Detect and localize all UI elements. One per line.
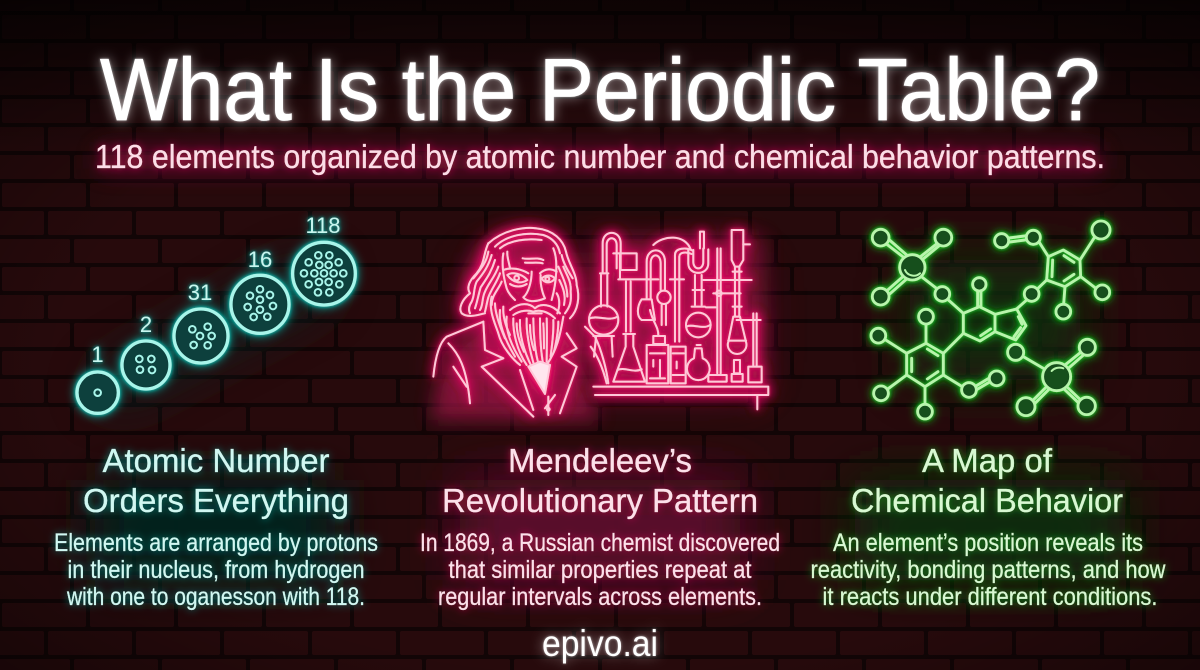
coloured wall halos [90, 150, 1125, 580]
heading: atomic number: Atomic Number [102, 443, 330, 480]
panel: atomic number [54, 213, 378, 611]
bonds [885, 236, 1096, 404]
body text: Mendeleev: In 1869, a Russian chemist discovered [420, 529, 780, 557]
heading: Mendeleev [442, 443, 758, 520]
panel: Mendeleev [420, 228, 780, 611]
body text: Mendeleev: that similar properties repeat at [448, 556, 752, 584]
heading: Mendeleev: Mendeleev’s [508, 443, 692, 480]
icon: molecule diagram [871, 221, 1110, 419]
icon: growing atoms diagram: 118 [305, 213, 341, 238]
subtitle: 118 elements organized by atomic number and chemical behavior patterns. [95, 138, 1105, 175]
tubes and bottles [638, 238, 693, 383]
illustration: Mendeleev portrait and lab apparatus [433, 228, 768, 417]
heading: chemical behavior [851, 443, 1123, 520]
U-tube and round flask [686, 232, 716, 380]
body text: chemical behavior: it reacts under different conditions. [822, 583, 1158, 611]
heading: atomic number: Orders Everything [83, 483, 349, 520]
portrait [433, 228, 608, 417]
stand and erlenmeyer [591, 253, 658, 383]
body text: atomic number: with one to oganesson with 118. [66, 583, 365, 611]
shelf [593, 387, 768, 395]
heading: chemical behavior: A Map of [922, 443, 1053, 480]
icon: growing atoms diagram: 1 [91, 342, 104, 367]
body text: chemical behavior [810, 529, 1166, 611]
ring stand and burette [703, 230, 762, 382]
icon: growing atoms diagram [77, 213, 355, 413]
body text: Mendeleev [420, 529, 780, 611]
heading: Mendeleev: Revolutionary Pattern [442, 483, 758, 520]
body text: Mendeleev: regular intervals across elements. [438, 583, 762, 611]
panel: chemical behavior [810, 221, 1166, 611]
retort flask [589, 233, 621, 357]
body text: atomic number: in their nucleus, from hydrogen [68, 556, 364, 584]
heading: chemical behavior: Chemical Behavior [851, 483, 1123, 520]
brand footer: epivo.ai [542, 623, 658, 664]
body text: chemical behavior: An element’s position reveals its [833, 529, 1143, 557]
title: What Is the Periodic Table? [100, 40, 1100, 139]
icon: growing atoms diagram: 16 [248, 247, 272, 272]
body text: atomic number: Elements are arranged by protons [54, 529, 378, 557]
atoms [871, 221, 1110, 419]
icon: growing atoms diagram: 31 [188, 280, 212, 305]
heading: atomic number [83, 443, 349, 520]
body text: atomic number [54, 529, 378, 611]
icon: growing atoms diagram: 2 [140, 312, 152, 337]
